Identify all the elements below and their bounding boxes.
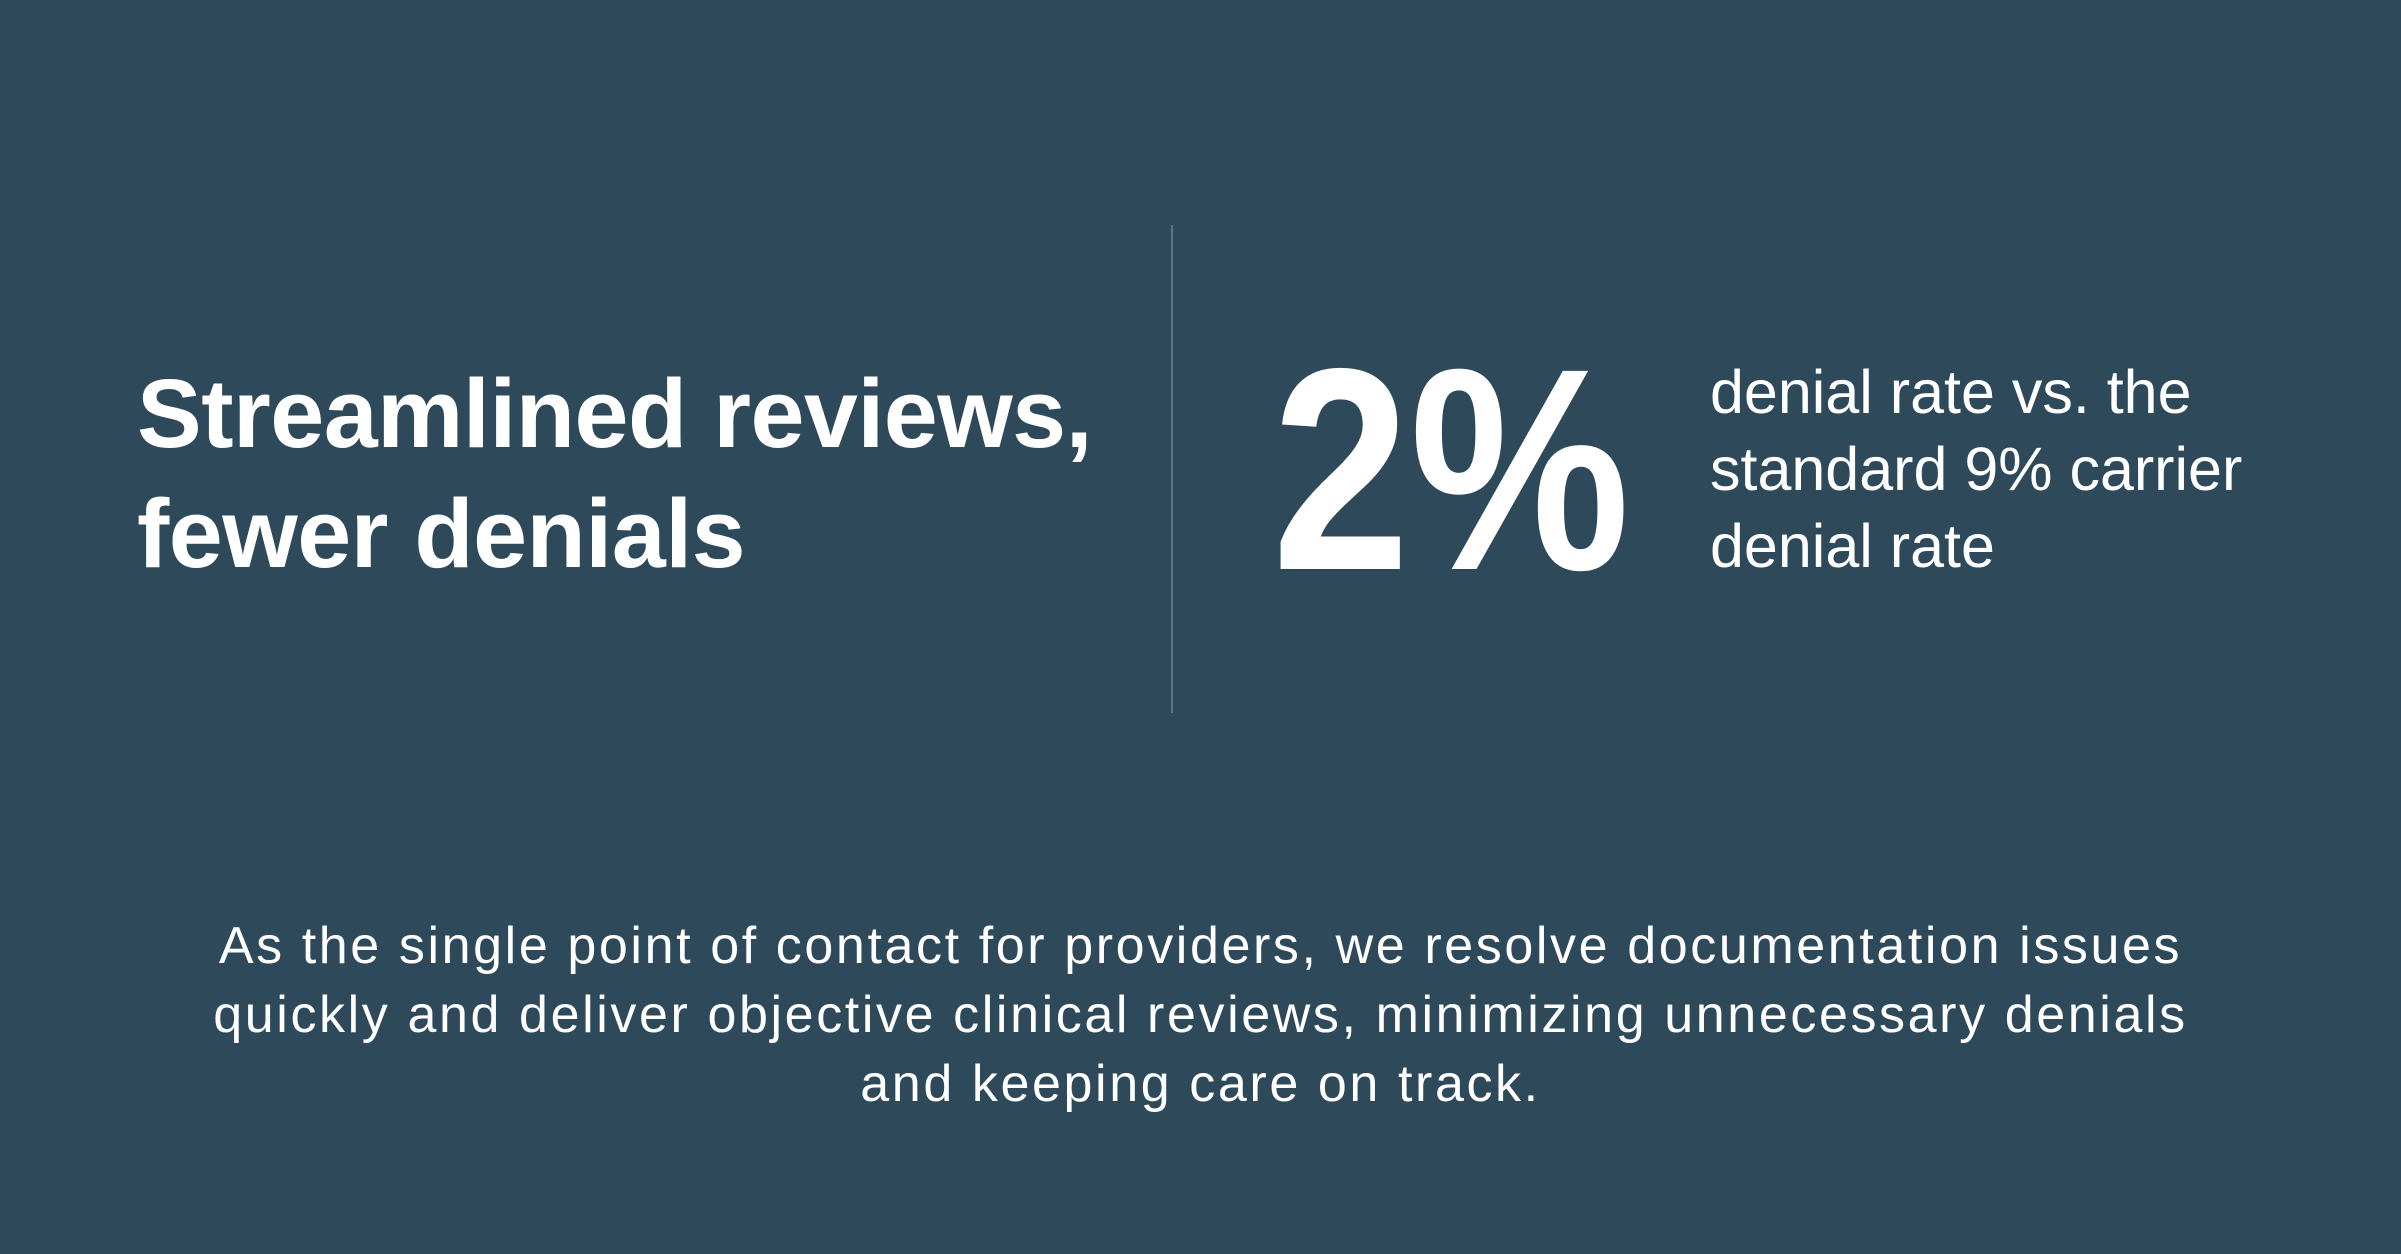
body paragraph: and keeping care on track. (860, 1055, 1541, 1113)
stat: 2%: 2% (1272, 309, 1630, 631)
title: fewer denials (137, 479, 745, 588)
divider (1171, 225, 1173, 713)
body paragraph (213, 917, 2188, 1113)
stat description: denial rate (1710, 512, 1995, 580)
body paragraph: quickly and deliver objective clinical reviews, minimizing unnecessary denials (213, 986, 2188, 1044)
stat description: denial rate vs. the (1710, 358, 2192, 426)
stat description (1710, 358, 2242, 580)
title: Streamlined reviews, (137, 359, 1092, 468)
title (137, 359, 1092, 588)
stat description: standard 9% carrier (1710, 435, 2242, 503)
body paragraph: As the single point of contact for providers, we resolve documentation issues (219, 917, 2182, 975)
